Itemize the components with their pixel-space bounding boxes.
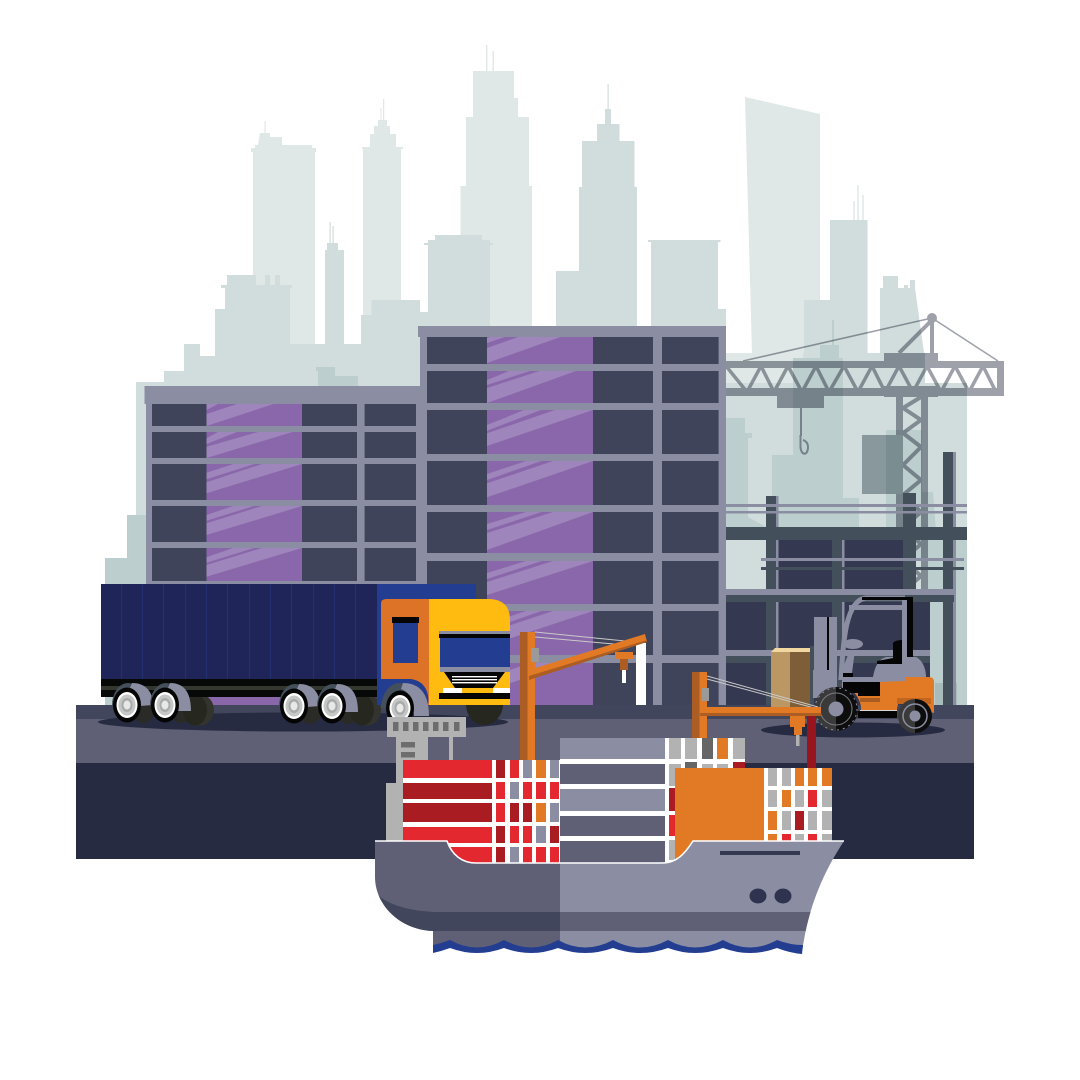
seat and body (873, 657, 926, 677)
purple glass right building (487, 337, 593, 705)
red container stack (403, 760, 560, 863)
cab yellow front (429, 599, 510, 705)
trailer and cab wheels (113, 688, 414, 726)
forklift wheels (814, 687, 932, 733)
large loading crane (692, 672, 821, 770)
orange container stack (675, 768, 832, 863)
blue cab back (377, 584, 476, 680)
forklift (771, 597, 934, 733)
steering wheel (838, 650, 855, 680)
ship bridge tower (386, 717, 466, 843)
small loading crane (520, 632, 647, 762)
blue water line (433, 940, 803, 954)
truck shadow (98, 712, 508, 732)
grille (444, 672, 505, 688)
hull slot (720, 851, 800, 855)
truck (101, 584, 510, 726)
headlights and bumper (443, 688, 462, 693)
trailer container (101, 584, 377, 679)
building under construction (726, 452, 967, 705)
mast (814, 617, 827, 687)
portholes (750, 888, 792, 904)
grey container stack (560, 738, 745, 863)
purple glass left building (206, 404, 302, 705)
mid skyline towers (136, 84, 967, 705)
left office building (144, 386, 421, 705)
cab orange side (381, 599, 429, 705)
darker foreground skyline blocks (105, 320, 967, 705)
inner dark wheels (131, 693, 503, 726)
cargo ship (370, 717, 850, 954)
city skyline background (105, 45, 967, 705)
windows right building (427, 337, 719, 705)
windows left building (152, 404, 416, 705)
trailer chassis (101, 679, 377, 697)
forklift shadow (761, 722, 945, 738)
orange chassis (837, 677, 934, 713)
fenders (112, 683, 429, 716)
quay ground (76, 705, 974, 859)
right office building (418, 326, 726, 705)
side window (392, 617, 419, 623)
ship hull (370, 838, 850, 948)
deck outline (375, 841, 844, 863)
roll cage (841, 598, 905, 680)
tower crane (726, 313, 1004, 707)
cardboard box (771, 646, 814, 707)
windshield (439, 631, 510, 634)
light back towers (251, 45, 820, 385)
white column segment (636, 643, 646, 705)
